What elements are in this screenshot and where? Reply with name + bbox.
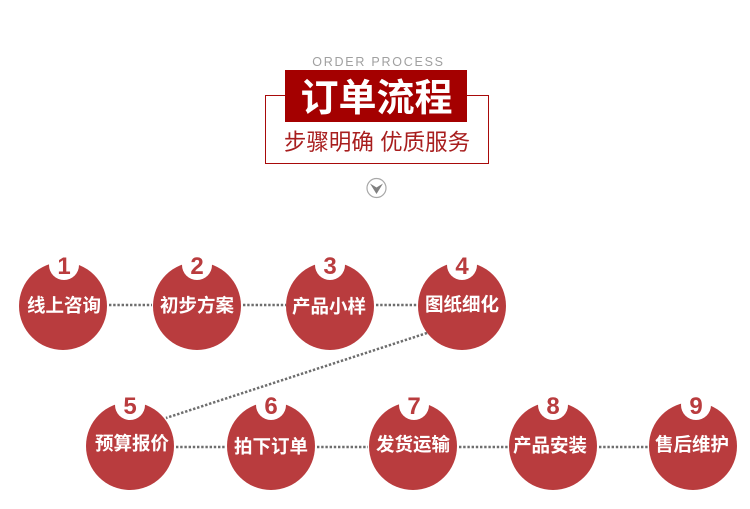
step 1 [19,250,107,350]
step 6: 6 [264,393,278,420]
step 5: 预算报价 [95,433,169,454]
title banner [285,70,467,122]
step 2: 初步方案 [160,295,234,316]
step 9: 9 [689,393,703,420]
step 4: 图纸细化 [425,294,499,315]
step 8 [509,390,597,490]
step 1: 1 [57,253,71,280]
step 3: 产品小样 [292,296,366,317]
step 9 [649,390,737,490]
subtitle outline box [266,96,488,164]
step 5 [86,390,174,490]
step 2 [153,250,241,350]
step 7: 发货运输 [376,434,450,455]
connectors: dotted lines [109,305,648,447]
step 8: 8 [546,393,560,420]
step 6 [227,390,315,490]
step 4 [418,250,506,350]
step 2: 2 [190,253,204,280]
step 1: 线上咨询 [27,295,101,316]
heading: english subtitle: ORDER PROCESS [312,55,445,69]
step 7 [369,390,457,490]
step 3: 3 [323,253,337,280]
step 3 [286,250,374,350]
subtitle text: 步骤明确 优质服务 [284,130,470,155]
title banner: 订单流程 [300,78,453,120]
step 6: 拍下订单 [234,436,308,457]
step 8: 产品安装 [513,435,587,456]
step 7: 7 [407,393,421,420]
icon: down chevron [367,178,386,198]
step 9: 售后维护 [655,434,729,455]
step 5: 5 [123,393,137,420]
step 4: 4 [455,253,469,280]
